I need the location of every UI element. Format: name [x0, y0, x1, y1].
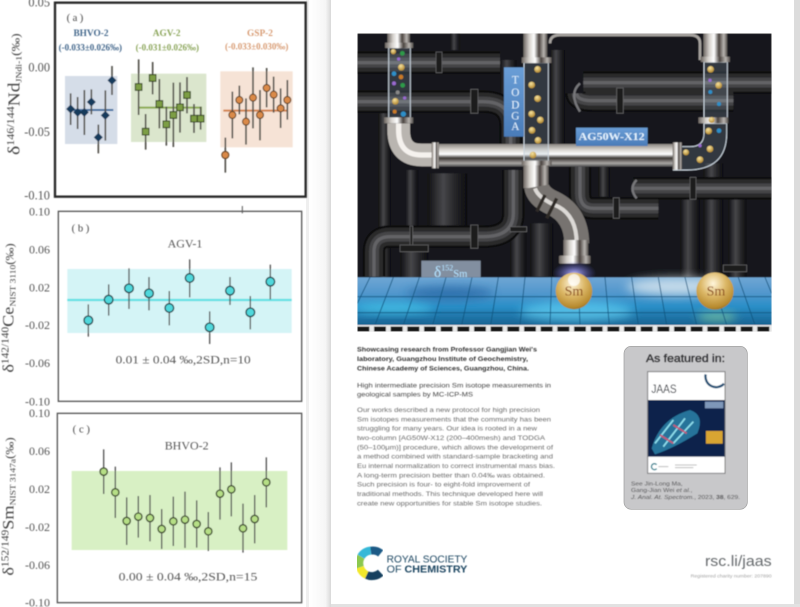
- abstract: traditional methods. This technique developed here will: [357, 491, 544, 498]
- RSC wordmark: OF CHEMISTRY: [387, 564, 467, 575]
- y-axis title a: 146/144: [6, 106, 17, 146]
- panel label a: (a): [67, 13, 84, 24]
- tick labels b: 0.06: [29, 243, 50, 257]
- error bars c: [104, 449, 266, 553]
- chrome pipes: [387, 33, 727, 264]
- tick labels b: [25, 205, 50, 408]
- RSC wordmark: [387, 554, 467, 575]
- floor edge pattern: [357, 325, 772, 332]
- tick labels c: [25, 406, 50, 607]
- markers c: [100, 468, 270, 535]
- shaded band: AGV-2: [131, 74, 206, 142]
- abstract: [357, 407, 555, 507]
- y-axis title c: Sm: [0, 505, 17, 530]
- RSC logo mark: [359, 551, 381, 576]
- shaded band: GSP-2: [220, 71, 293, 147]
- label: TODGA: T: [512, 74, 519, 86]
- label: TODGA: [504, 67, 524, 137]
- tick labels a: [24, 0, 50, 202]
- y-axis title c: (‰): [4, 437, 16, 459]
- panel: as featured in: [624, 346, 747, 509]
- legend: BHVO-2: [59, 29, 122, 53]
- label: TODGA: G: [511, 110, 519, 122]
- sample name c: BHVO-2: [165, 438, 209, 452]
- tick labels b: -0.06: [25, 356, 50, 370]
- y-axis title a: δ: [4, 147, 23, 155]
- abstract: Our works described a new protocol for high precision: [357, 407, 540, 414]
- y-axis title b: (‰): [4, 243, 16, 265]
- label: delta 152 Sm: [421, 261, 481, 281]
- floor grid: [357, 277, 772, 325]
- statistics c: 0.00 ± 0.04 ‰,2SD,n=15: [119, 570, 257, 584]
- tick labels a: -0.05: [24, 125, 50, 139]
- label: TODGA: O: [511, 87, 519, 99]
- stray tick: [241, 206, 244, 213]
- markers: GSP-2: [222, 84, 291, 158]
- text block: description: [357, 346, 555, 507]
- abstract: create new opportunities for stable Sm isotope studies.: [357, 500, 542, 507]
- mean lines a: [72, 108, 288, 119]
- shaded band c: [72, 471, 287, 550]
- mean line b: [67, 296, 292, 303]
- shaded band: BHVO-2: [65, 76, 117, 144]
- legend: GSP-2: (-0.033±0.030‰): [225, 41, 288, 51]
- research credit: [357, 346, 537, 372]
- hero illustration: chromatography pipes: [353, 33, 772, 332]
- y-axis title c: δ: [0, 568, 17, 576]
- abstract: two-column [AG50W-X12 (200–400mesh) and TODGA: [357, 435, 546, 442]
- card background: [624, 346, 747, 509]
- beads: [391, 49, 722, 163]
- research credit: Chinese Academy of Sciences, Guangzhou, China.: [357, 365, 529, 372]
- citation: See Jin-Long Ma,: [631, 481, 683, 487]
- y-axis title c: 152/149: [0, 530, 11, 567]
- shaded band b: [67, 269, 292, 333]
- article title: High intermediate precision Sm isotope measurements in: [357, 382, 551, 389]
- y-axis title a: JNdi-1: [13, 56, 23, 82]
- scene background: [357, 33, 772, 332]
- article title: geological samples by MC-ICP-MS: [357, 392, 474, 399]
- y-axis title b: δ: [0, 365, 17, 373]
- legend: BHVO-2: (-0.033±0.026‰): [59, 43, 122, 53]
- tick labels c: 0.02: [29, 482, 50, 496]
- y-axis title b: NIST 3110: [8, 265, 17, 307]
- glass columns: [389, 47, 727, 170]
- y-axis title b: Ce: [0, 307, 17, 327]
- abstract: struggling for many years. Our idea is rooted in a new: [357, 426, 537, 433]
- legend: GSP-2: [225, 29, 288, 51]
- abstract: Such precision is four- to eight-fold improvement of: [357, 482, 530, 489]
- panel b: Ce isotope chart: [0, 205, 302, 408]
- y-axis title b: 142/140: [0, 327, 11, 364]
- journal cover: [648, 372, 725, 473]
- markers: AGV-2: [135, 75, 204, 135]
- frame b: [58, 211, 302, 401]
- dark vertical pipes: [378, 33, 747, 278]
- tick labels c: -0.02: [25, 520, 50, 534]
- small coloured beads: [392, 51, 721, 147]
- abstract: a method combined with standard-sample bracketing and: [357, 454, 553, 461]
- chrome column collars: [384, 43, 730, 170]
- y-axis title a: (‰): [8, 33, 22, 56]
- legend: AGV-2: (-0.031±0.026‰): [136, 43, 199, 53]
- frame a: [55, 3, 306, 197]
- legend: AGV-2: AGV-2: [153, 29, 181, 39]
- citation: [630, 481, 740, 501]
- y-axis title c: NIST 3147a: [8, 459, 17, 505]
- floor glow: [353, 278, 737, 322]
- abstract: A long-term precision better than 0.04‰ was obtained.: [357, 472, 545, 479]
- panel a: Nd isotope chart: [4, 0, 306, 202]
- charity number: Registered charity number: 207890: [691, 574, 772, 579]
- abstract: Eu internal normalization to correct instrumental mass bias.: [357, 463, 555, 470]
- article title: [357, 382, 551, 399]
- legend: AGV-2: [136, 29, 199, 53]
- y-axis title a: Nd: [4, 82, 23, 106]
- label: delta 152 Sm: δ: [434, 264, 441, 281]
- tick labels a: -0.10: [24, 188, 50, 202]
- Sm sphere right: Sm: [707, 285, 725, 300]
- panel c: Sm isotope chart: [0, 406, 302, 607]
- tick labels b: -0.02: [25, 318, 50, 332]
- card heading: As featured in:: [646, 353, 725, 365]
- label: delta 152 Sm: Sm: [453, 269, 468, 280]
- Sm sphere centre: Sm: [565, 285, 583, 300]
- dark shaded pipes: [357, 63, 772, 277]
- dark pipe collars: [400, 52, 747, 272]
- footer: [359, 551, 772, 579]
- abstract: Sm isotopes measurements that the community has been: [357, 416, 551, 423]
- research credit: Showcasing research from Professor Gangjian Wei's: [357, 346, 537, 354]
- statistics b: 0.01 ± 0.04 ‰,2SD,n=10: [116, 352, 251, 366]
- markers b: [84, 274, 275, 332]
- tick labels c: 0.06: [29, 444, 50, 458]
- tick labels b: 0.10: [29, 205, 50, 219]
- RSC wordmark: ROYAL SOCIETY: [387, 554, 467, 565]
- panel label b: (b): [72, 223, 90, 234]
- frame c: [57, 413, 302, 603]
- tick labels c: -0.06: [25, 558, 50, 572]
- Sm sphere right: [696, 272, 734, 310]
- error bars b: [88, 259, 270, 344]
- journal url: rsc.li/jaas: [705, 554, 772, 570]
- journal cover: JAAS: [651, 382, 677, 396]
- blue nozzle glow: [553, 262, 596, 280]
- tick labels c: 0.10: [29, 406, 50, 420]
- markers: BHVO-2: [66, 76, 116, 142]
- abstract: (50–100μm)] procedure, which allows the development of: [357, 444, 553, 451]
- legend: GSP-2: GSP-2: [247, 29, 273, 39]
- error bars a: [71, 59, 287, 173]
- panel label c: (c): [73, 424, 90, 435]
- Sm sphere centre: [556, 273, 592, 309]
- label: AG50W-X12: [576, 128, 648, 146]
- sample name b: AGV-1: [168, 237, 202, 251]
- floor: [357, 277, 772, 326]
- label: delta 152 Sm: 152: [441, 263, 453, 272]
- tick labels a: 0.00: [28, 60, 50, 74]
- citation: J. Anal. At. Spectrom. , 2023, 38, 629.: [630, 495, 740, 501]
- legend: BHVO-2: BHVO-2: [73, 29, 109, 39]
- label: TODGA: D: [511, 99, 519, 111]
- tick labels b: 0.02: [29, 281, 50, 295]
- citation: Gang-Jian Wei et al.,: [631, 488, 693, 494]
- tick labels b: -0.10: [25, 394, 50, 408]
- label: AG50W-X12: AG50W-X12: [579, 132, 645, 143]
- label: TODGA: A: [511, 121, 520, 133]
- research credit: laboratory, Guangzhou Institute of Geochemistry,: [357, 356, 528, 363]
